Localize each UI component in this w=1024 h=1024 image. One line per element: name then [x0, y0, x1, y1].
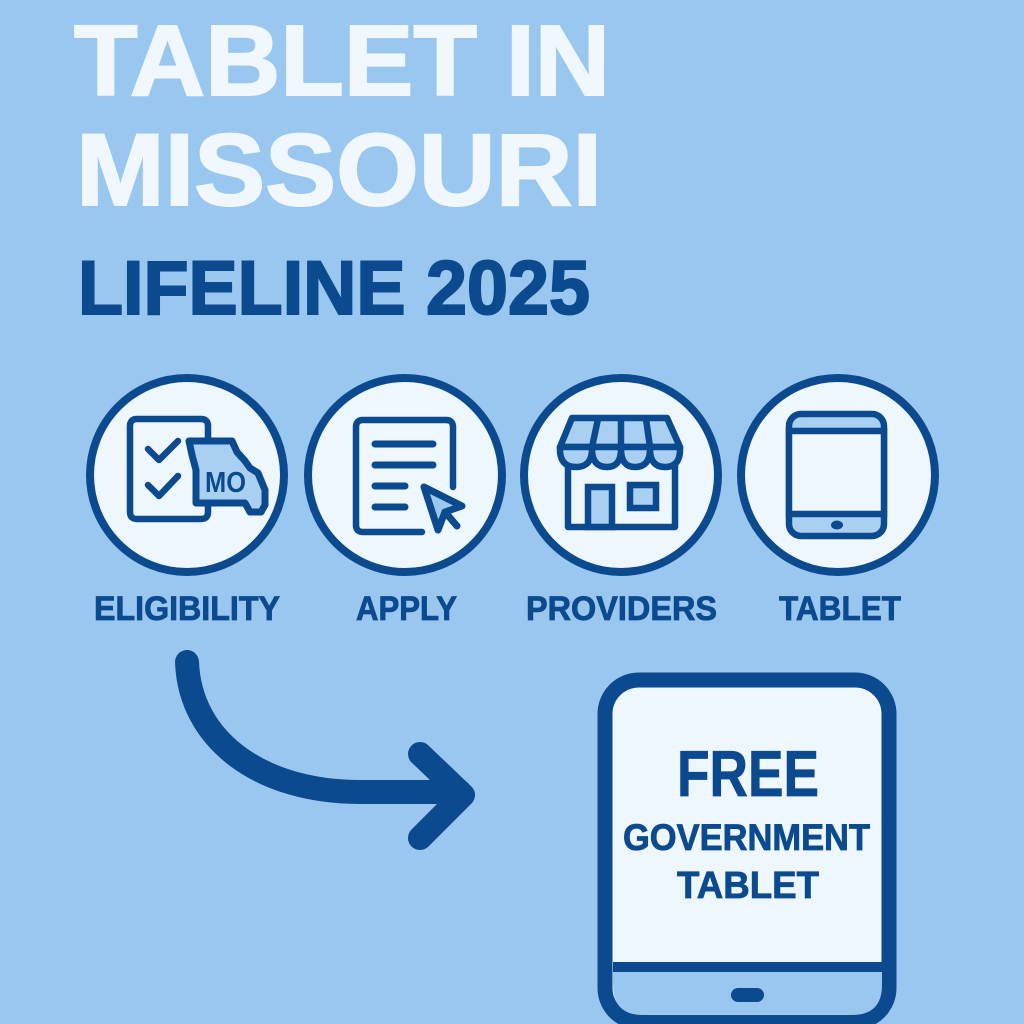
icon: storefront [524, 378, 718, 572]
text: free government tablet: GOVERNMENT [623, 817, 870, 858]
panel: free government tablet [605, 680, 889, 1022]
label: providers: PROVIDERS [526, 590, 717, 628]
arrow [187, 662, 463, 838]
icon: large tablet [605, 680, 889, 1022]
text: free government tablet: FREE [677, 737, 819, 810]
label: apply: APPLY [356, 590, 457, 628]
icon: tablet [741, 378, 935, 572]
title: MISSOURI [76, 113, 602, 227]
panel: tablet [741, 378, 935, 628]
icon: application form with cursor [308, 378, 502, 572]
subtitle: LIFELINE 2025 [78, 246, 590, 331]
label: tablet: TABLET [779, 590, 901, 628]
label: eligibility: ELIGIBILITY [94, 590, 280, 628]
title [74, 5, 610, 227]
panel: eligibility [90, 378, 284, 628]
icon: eligibility checklist and Missouri [90, 378, 284, 572]
icon: eligibility checklist and Missouri: MO [205, 467, 246, 499]
text: free government tablet [623, 737, 870, 907]
text: free government tablet: TABLET [677, 865, 819, 907]
panel: apply [308, 378, 502, 628]
panel: providers [524, 378, 718, 628]
title: TABLET IN [74, 5, 610, 117]
